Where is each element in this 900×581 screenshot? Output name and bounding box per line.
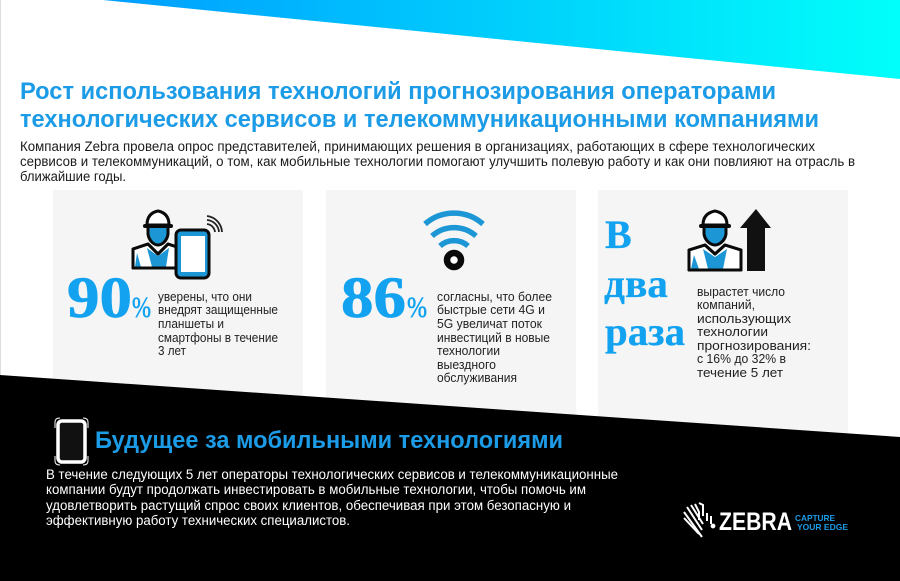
text: doubling description: использующих bbox=[697, 312, 792, 326]
panel: 86 percent bbox=[326, 190, 576, 420]
text: 86% description bbox=[437, 290, 552, 385]
banner: gradient triangle bbox=[103, 0, 900, 79]
text: footer description: компании будут продолжать инвестировать в мобильные технологии, чтобы помочь им bbox=[46, 482, 586, 497]
stat: 86%: 86 bbox=[341, 265, 406, 330]
text: doubling description: технологии bbox=[697, 325, 768, 339]
text: 86% description: инвестиций в новые bbox=[437, 331, 550, 345]
text: doubling description: компаний, bbox=[697, 298, 755, 312]
text: 90% description bbox=[158, 290, 278, 358]
text: footer description bbox=[46, 467, 618, 528]
stat: twofold: В bbox=[605, 212, 632, 257]
stat: twofold bbox=[604, 212, 685, 354]
intro text bbox=[20, 139, 855, 184]
stat: twofold: раза bbox=[605, 309, 685, 354]
icon: tablet bbox=[55, 418, 88, 465]
text: 86% description: быстрые сети 4G и bbox=[437, 303, 545, 317]
icon: worker with tablet bbox=[133, 211, 222, 278]
text: 90% description: смартфоны в течение bbox=[158, 331, 278, 345]
title: Рост использования технологий прогнозирования операторами bbox=[20, 78, 776, 105]
text: 86% description: обслуживания bbox=[437, 371, 517, 385]
panel: doubling bbox=[598, 190, 848, 440]
stat: twofold: два bbox=[604, 261, 668, 306]
text: 90% description: уверены, что они bbox=[158, 290, 252, 304]
panel: 90 percent bbox=[53, 190, 303, 420]
text: doubling description: с 16% до 32% в bbox=[697, 352, 786, 366]
text: 86% description: согласны, что более bbox=[437, 290, 552, 304]
text: doubling description: прогнозирования: bbox=[697, 339, 811, 353]
text: doubling description bbox=[697, 285, 811, 380]
stat: 86%: % bbox=[407, 291, 427, 324]
text: doubling description: течение 5 лет bbox=[697, 366, 783, 380]
text: doubling description: вырастет число bbox=[697, 285, 785, 299]
text: footer description: эффективную работу технических специалистов. bbox=[46, 513, 350, 528]
stat: 90% bbox=[67, 265, 151, 330]
logo: Zebra: YOUR EDGE bbox=[797, 522, 848, 532]
stat: 90%: 90 bbox=[67, 265, 132, 330]
title: технологических сервисов и телекоммуникационными компаниями bbox=[20, 106, 819, 133]
intro text: сервисов и телекоммуникаций, о том, как мобильные технологии помогают улучшить полевую работу и как они повлияют на отрасль в bbox=[20, 154, 855, 169]
text: 90% description: 3 лет bbox=[158, 344, 186, 358]
logo: Zebra bbox=[684, 503, 848, 537]
icon: worker with up arrow bbox=[689, 209, 771, 271]
logo: Zebra: ZEBRA bbox=[719, 508, 792, 536]
heading: future is mobile: Будущее за мобильными технологиями bbox=[95, 427, 563, 454]
intro text: ближайшие годы. bbox=[20, 169, 126, 184]
text: 90% description: внедрят защищенные bbox=[158, 303, 278, 317]
icon: wifi bbox=[425, 213, 483, 267]
logo: Zebra: CAPTURE bbox=[795, 513, 835, 523]
title bbox=[20, 78, 819, 133]
text: footer description: В течение следующих 5 лет операторы технологических сервисов и телекоммуникационные bbox=[46, 467, 618, 482]
text: 90% description: планшеты и bbox=[158, 317, 224, 331]
text: 86% description: 5G увеличат поток bbox=[437, 317, 542, 331]
text: 86% description: технологии bbox=[437, 344, 500, 358]
intro text: Компания Zebra провела опрос представителей, принимающих решения в организациях, работающих в сфере технологических bbox=[20, 139, 815, 154]
text: 86% description: выездного bbox=[437, 358, 496, 372]
stat: 86% bbox=[341, 265, 427, 330]
stat: 90%: % bbox=[132, 291, 151, 324]
panel: black footer bbox=[0, 375, 900, 581]
icon: zebra head bbox=[684, 503, 714, 537]
text: footer description: удовлетворить растущий спрос своих клиентов, обеспечивая при этом безопасную и bbox=[46, 498, 571, 513]
